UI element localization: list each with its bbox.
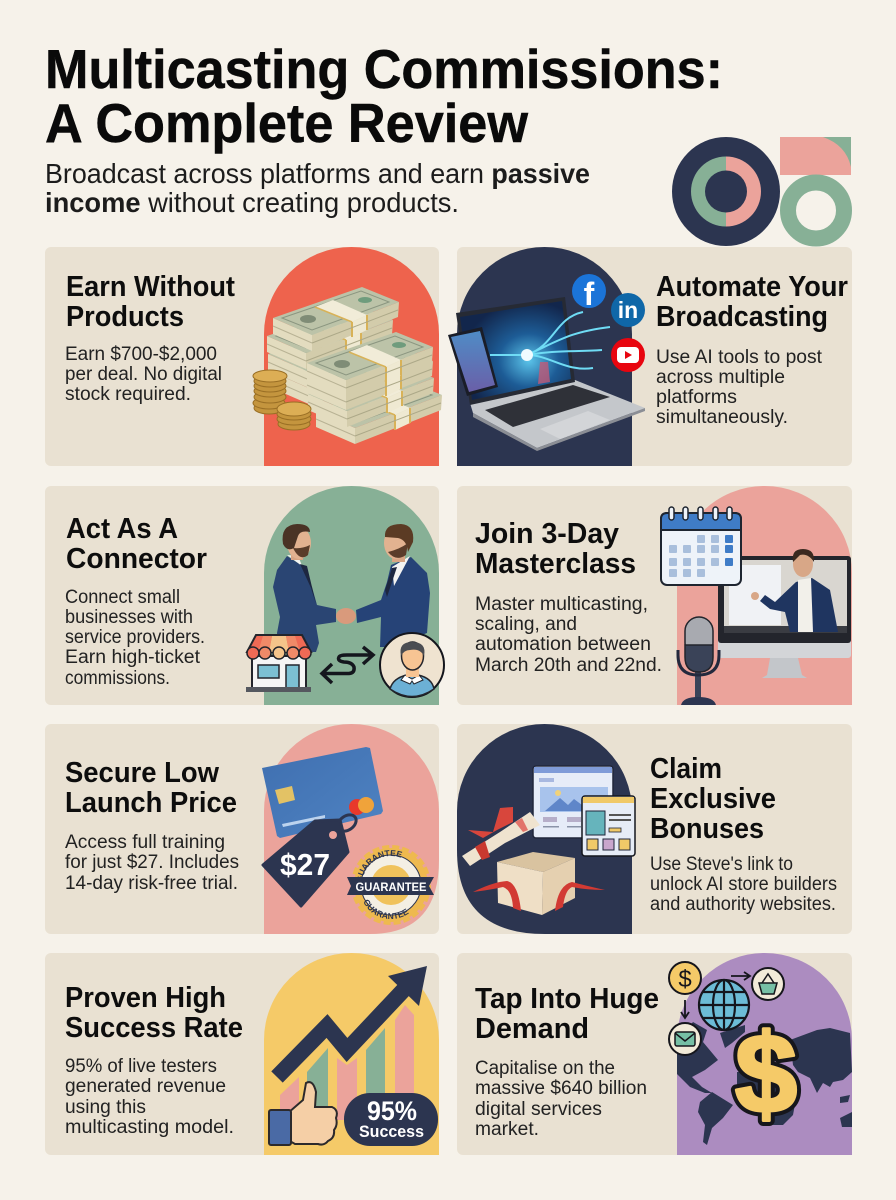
panel: join 3-day masterclass <box>457 486 852 705</box>
heading: Secure Low <box>65 757 219 789</box>
chart: rising bars <box>280 1005 414 1120</box>
arch: navy blob <box>457 724 632 934</box>
heading <box>65 757 237 819</box>
heading: Bonuses <box>650 813 764 845</box>
body text: March 20th and 22nd. <box>475 655 662 676</box>
icon: storefront <box>246 635 311 692</box>
body text: and authority websites. <box>650 894 836 915</box>
arrows: connections <box>681 972 750 1018</box>
icon: linkedin <box>611 293 645 327</box>
icon: guarantee badge: GUARANTEE <box>356 880 426 894</box>
arch: pink <box>677 486 852 705</box>
panel: tap into huge demand <box>457 953 852 1155</box>
icon: globe <box>699 980 749 1030</box>
title <box>45 38 723 154</box>
heading: Act As A <box>66 513 178 545</box>
body text: Earn $700-$2,000 <box>65 344 217 365</box>
heading <box>66 513 207 575</box>
subtitle: income without creating products. <box>45 187 459 218</box>
body text: scaling, and <box>475 614 577 635</box>
body text: Master multicasting, <box>475 594 648 615</box>
badge: 95% success: 95% <box>367 1096 417 1126</box>
arch: red <box>264 247 439 466</box>
body text: commissions. <box>65 668 170 689</box>
panel: proven high success rate <box>45 953 439 1155</box>
icon: dollar sign: $ <box>735 1011 797 1136</box>
icon: desktop monitor with presenter <box>718 549 851 678</box>
body text: stock required. <box>65 384 191 405</box>
body text: for just $27. Includes <box>65 852 239 873</box>
title: Multicasting Commissions: <box>45 38 723 100</box>
presenter <box>760 578 838 632</box>
arch: yellow <box>264 953 439 1155</box>
arch: purple <box>677 953 852 1155</box>
body text: digital services <box>475 1099 602 1120</box>
heading <box>65 982 243 1044</box>
icon: guarantee badge <box>347 845 434 925</box>
arch: green <box>264 486 439 705</box>
heading: Exclusive <box>650 783 776 815</box>
body text: 95% of live testers <box>65 1056 217 1077</box>
body text <box>656 347 823 428</box>
icon: exchange arrows <box>322 647 373 683</box>
coins <box>253 370 311 430</box>
icon: linkedin: in <box>618 297 638 323</box>
heading: Claim <box>650 753 722 785</box>
body text: Connect small <box>65 587 180 608</box>
panel: secure low launch price <box>45 724 439 934</box>
body text: businesses with <box>65 607 193 628</box>
body text: simultaneously. <box>656 407 788 428</box>
icon: basket <box>752 968 784 1000</box>
arch: pink blob <box>264 724 439 934</box>
body text: unlock AI store builders <box>650 874 837 895</box>
heading: Tap Into Huge <box>475 983 659 1015</box>
body text <box>650 854 837 915</box>
subtitle: Broadcast across platforms and earn passive <box>45 158 590 189</box>
heading: Join 3-Day <box>475 518 619 550</box>
body text: Capitalise on the <box>475 1058 615 1079</box>
body text: massive $640 billion <box>475 1078 647 1099</box>
arch: navy <box>457 247 632 466</box>
icon: envelope <box>669 1023 701 1055</box>
panel: act as a connector <box>45 486 444 705</box>
heading: Earn Without <box>66 271 235 303</box>
heading: Automate Your <box>656 271 848 303</box>
body text: 14-day risk-free trial. <box>65 873 238 894</box>
heading: Products <box>66 301 184 333</box>
icon: dollar coin: $ <box>678 966 692 993</box>
body text: Earn high-ticket <box>65 647 201 668</box>
panel: claim exclusive bonuses <box>457 724 852 934</box>
body text: automation between <box>475 634 651 655</box>
icon: website window large <box>533 766 613 838</box>
icon: facebook: f <box>584 276 595 312</box>
body text <box>65 1056 234 1138</box>
icon: dollar coin <box>669 962 701 994</box>
icon: calendar <box>661 507 741 585</box>
icon: guarantee badge: GUARANTEE <box>364 900 409 919</box>
body text: service providers. <box>65 627 205 648</box>
body text: per deal. No digital <box>65 364 222 385</box>
left man <box>273 524 336 652</box>
body text: Access full training <box>65 832 225 853</box>
icon: microphone <box>678 617 719 705</box>
heading <box>650 753 776 845</box>
badge: 95% success <box>344 1093 438 1146</box>
body text <box>65 832 239 894</box>
icon: dollar sign: $ <box>735 1011 797 1136</box>
panel: earn without products <box>45 247 442 466</box>
heading: Masterclass <box>475 548 636 580</box>
heading <box>475 518 636 580</box>
body text: across multiple <box>656 367 785 388</box>
title: A Complete Review <box>45 92 528 154</box>
body text: Use AI tools to post <box>656 347 823 368</box>
body text: using this <box>65 1097 146 1118</box>
heading: Success Rate <box>65 1012 243 1044</box>
right man <box>356 524 430 647</box>
icon: laptop and phone <box>448 297 645 451</box>
body text <box>475 1058 647 1140</box>
body text: Use Steve's link to <box>650 854 793 875</box>
arrow: rising trend <box>277 966 427 1077</box>
illustration: two businessmen shaking hands <box>273 524 430 652</box>
heading: Proven High <box>65 982 226 1014</box>
handshake <box>336 608 356 624</box>
icon: youtube <box>611 338 645 372</box>
heading: Broadcasting <box>656 301 828 333</box>
icon: guarantee badge: GUARANTEE <box>358 850 402 877</box>
heading <box>656 271 848 333</box>
body text: market. <box>475 1119 539 1140</box>
icon: facebook <box>572 274 606 312</box>
body text <box>475 594 662 676</box>
panel: automate your broadcasting <box>448 247 852 466</box>
icon: price tag <box>263 812 359 906</box>
subtitle <box>45 158 590 218</box>
world map <box>670 1022 852 1145</box>
body text: multicasting model. <box>65 1117 234 1138</box>
heading: Connector <box>66 543 207 575</box>
heading <box>475 983 659 1045</box>
heading <box>66 271 235 333</box>
decorative geometric shapes <box>672 137 851 246</box>
body text <box>65 344 222 405</box>
icon: stacks of cash and coins <box>253 287 442 444</box>
body text: platforms <box>656 387 737 408</box>
icon: thumbs up <box>269 1082 337 1145</box>
icon: open gift box <box>462 807 605 915</box>
heading: Launch Price <box>65 787 237 819</box>
icon: credit card <box>262 747 383 838</box>
icon: person circle <box>380 633 444 697</box>
badge: 95% success: Success <box>359 1122 424 1141</box>
body text: generated revenue <box>65 1076 226 1097</box>
icon: price tag: $27 <box>280 847 330 882</box>
body text <box>65 587 205 689</box>
heading: Demand <box>475 1013 589 1045</box>
icon: website window small <box>582 796 635 856</box>
